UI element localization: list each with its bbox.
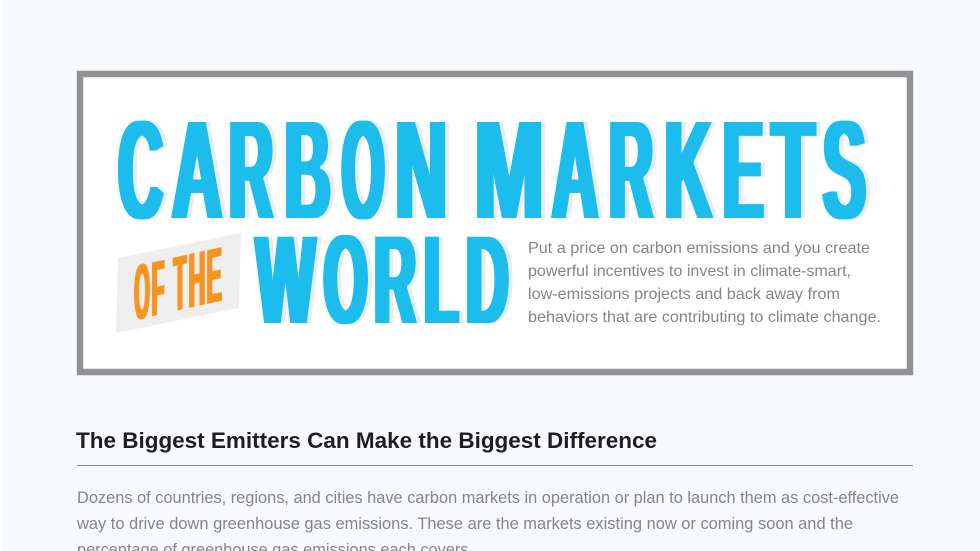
badge: of the: O: [134, 246, 150, 337]
title: carbon markets: B: [285, 91, 330, 250]
title: world: R: [374, 209, 416, 352]
title: carbon markets: C: [118, 91, 163, 250]
section paragraph: [76, 489, 899, 551]
title: carbon markets: T: [772, 91, 814, 250]
title: carbon markets: E: [723, 91, 763, 250]
section paragraph: Dozens of countries, regions, and cities have carbon markets in operation or plan to launch them as cost-effective: [77, 489, 899, 507]
title: world: O: [324, 209, 367, 352]
panel: title banner: [80, 74, 910, 372]
intro text: low-emissions projects and back away from: [528, 286, 840, 303]
title: carbon markets: A: [172, 91, 222, 250]
intro text: powerful incentives to invest in climate-smart,: [528, 263, 851, 280]
badge: of the: F: [152, 243, 164, 333]
title: carbon markets: R: [609, 91, 653, 250]
title: carbon markets: K: [665, 91, 712, 250]
panel: title banner: S: [823, 91, 866, 250]
title: world: W: [256, 209, 315, 352]
title: world: L: [424, 209, 458, 352]
panel: title banner: D: [466, 209, 508, 352]
title: carbon markets: M: [474, 91, 544, 250]
intro text: Put a price on carbon emissions and you create: [528, 240, 870, 257]
title: carbon markets: N: [395, 91, 447, 250]
badge: of the: H: [188, 234, 205, 325]
intro text: [528, 240, 881, 326]
title: carbon markets: A: [552, 91, 598, 250]
intro text: behaviors that are contributing to climate change.: [528, 309, 881, 326]
badge: of the: [116, 231, 241, 337]
title: carbon markets: R: [229, 91, 273, 250]
badge: of the: T: [174, 238, 186, 328]
section paragraph: way to drive down greenhouse gas emissions. These are the markets existing now or coming soon and the: [76, 515, 853, 533]
section heading: The Biggest Emitters Can Make the Biggest Difference: [76, 428, 657, 453]
badge: of the: E: [207, 231, 222, 321]
title: carbon markets: O: [342, 91, 384, 250]
